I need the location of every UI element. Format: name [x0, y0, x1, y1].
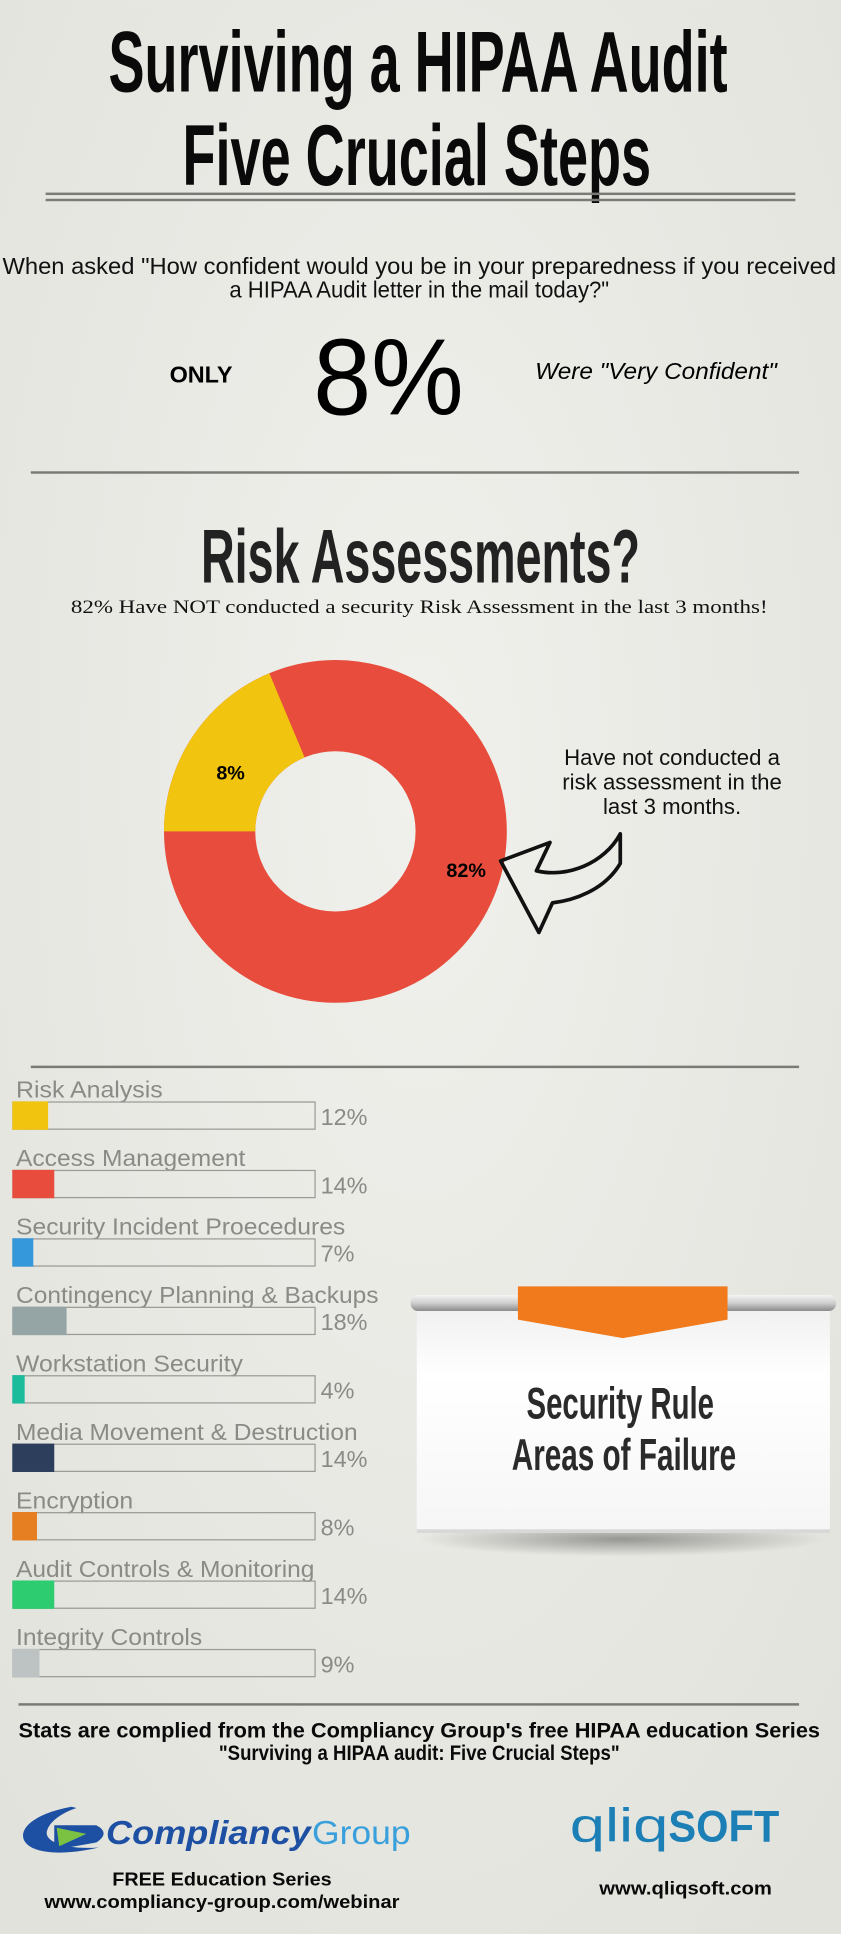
bar chart: security rule areas of failure: 9% — [321, 1651, 354, 1677]
bar chart: security rule areas of failure: Encryption — [16, 1487, 133, 1513]
bar chart: security rule areas of failure: Workstation Security — [16, 1350, 243, 1376]
bar chart: security rule areas of failure: Audit Controls & Monitoring — [16, 1556, 314, 1582]
bar chart: security rule areas of failure: 14% — [321, 1446, 367, 1472]
banner: security rule areas of failure: Security Rule — [527, 1379, 714, 1428]
donut chart: 82% — [446, 860, 486, 882]
bar chart: security rule areas of failure: Media Movement & Destruction — [16, 1419, 358, 1445]
bar chart: security rule areas of failure — [12, 1077, 379, 1677]
donut chart: 8% — [216, 763, 245, 785]
subtitle: 82% Have NOT conducted a security Risk Assessment in the last 3 months! — [71, 597, 768, 617]
footer source text — [18, 1720, 820, 1765]
compliancy text: www.compliancy-group.com/webinar — [43, 1891, 400, 1912]
bar chart: security rule areas of failure: Security Incident Proecedures — [16, 1214, 345, 1240]
bar chart: security rule areas of failure: 14% — [321, 1583, 367, 1609]
callout text: last 3 months. — [603, 794, 741, 819]
stat: only 8% very confident: Were "Very Confident" — [535, 358, 779, 384]
question text: a HIPAA Audit letter in the mail today?" — [229, 276, 609, 302]
question text — [2, 253, 836, 302]
logo: compliancy group: Compliancy — [106, 1815, 312, 1852]
logo: qliqsoft: qliq — [570, 1799, 668, 1851]
footer source text: "Surviving a HIPAA audit: Five Crucial Steps" — [219, 1742, 620, 1765]
logo: compliancy group — [23, 1807, 411, 1853]
title — [109, 14, 728, 204]
bar chart: security rule areas of failure: 12% — [321, 1104, 367, 1130]
donut chart — [164, 673, 486, 957]
bar chart: security rule areas of failure: Access Management — [16, 1145, 246, 1171]
bar chart: security rule areas of failure: Contingency Planning & Backups — [16, 1282, 379, 1308]
stat: only 8% very confident: 8% — [313, 317, 464, 438]
bar chart: security rule areas of failure: 18% — [321, 1309, 367, 1335]
compliancy text: FREE Education Series — [112, 1869, 332, 1890]
bar chart: security rule areas of failure: 14% — [321, 1172, 367, 1198]
qliqsoft url: www.qliqsoft.com — [598, 1877, 772, 1898]
logo: compliancy group: Group — [312, 1815, 411, 1852]
logo: qliqsoft: SOFT — [668, 1802, 779, 1851]
stat: only 8% very confident: ONLY — [170, 361, 233, 387]
logo: qliqsoft — [570, 1799, 779, 1851]
bar chart: security rule areas of failure: 4% — [321, 1378, 354, 1404]
bar chart: security rule areas of failure: 8% — [321, 1514, 354, 1540]
banner: security rule areas of failure: Areas of Failure — [512, 1431, 736, 1480]
callout text: risk assessment in the — [562, 769, 782, 794]
bar chart: security rule areas of failure: Risk Analysis — [16, 1077, 163, 1103]
icon: hand-drawn arrow — [501, 834, 620, 932]
banner: security rule areas of failure — [411, 1286, 836, 1556]
callout text — [562, 745, 782, 819]
stat: only 8% very confident — [170, 317, 779, 438]
question text: When asked "How confident would you be in your preparedness if you received — [2, 253, 836, 279]
bar chart: security rule areas of failure: 7% — [321, 1241, 354, 1267]
footer source text: Stats are complied from the Compliancy Group's free HIPAA education Series — [18, 1720, 820, 1743]
bar chart: security rule areas of failure: Integrity Controls — [16, 1624, 202, 1650]
callout text: Have not conducted a — [564, 745, 781, 770]
compliancy text — [43, 1869, 400, 1912]
